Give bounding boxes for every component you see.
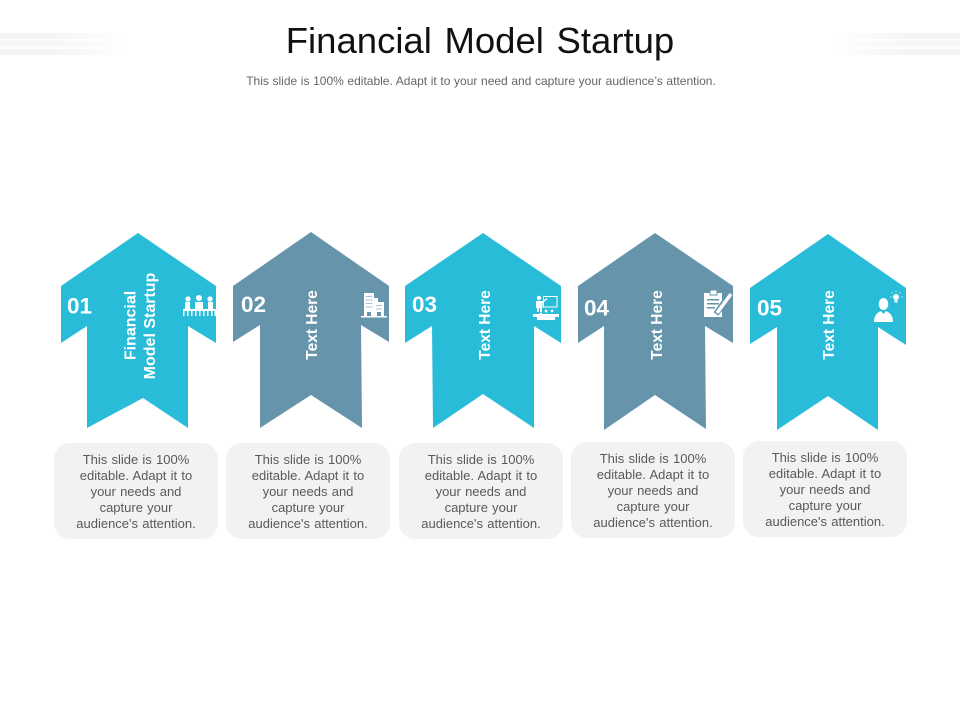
icon: building xyxy=(361,293,387,318)
text card 3: audience's attention. xyxy=(421,516,541,531)
arrow 4: Text Here xyxy=(649,290,666,360)
text card 1: capture your xyxy=(100,500,172,515)
text card 5: audience's attention. xyxy=(765,514,885,529)
arrow 1: Financial xyxy=(122,291,140,360)
arrow 4 xyxy=(578,233,733,430)
arrow 3: Text Here xyxy=(477,290,494,360)
arrow 2 xyxy=(233,232,389,428)
text card 1: editable. Adapt it to xyxy=(80,468,192,483)
text card 2: This slide is 100% xyxy=(255,452,361,467)
text card 2: editable. Adapt it to xyxy=(252,468,364,483)
decorative stripes left xyxy=(0,33,70,55)
arrow 2: Text Here xyxy=(304,290,321,360)
arrow 2: 02 xyxy=(241,292,266,317)
text card 4: audience's attention. xyxy=(593,515,713,530)
text card 2: your needs and xyxy=(263,484,353,499)
arrow 5 xyxy=(750,234,906,430)
text card 1: your needs and xyxy=(91,484,181,499)
text card 5: your needs and xyxy=(780,482,870,497)
subtitle: This slide is 100% editable. Adapt it to your need and capture your audience’s attention. xyxy=(246,74,716,88)
text card 3: capture your xyxy=(445,500,517,515)
text card 3 xyxy=(399,443,563,539)
text card 2 xyxy=(226,443,390,539)
text card 1 xyxy=(54,443,218,539)
arrow 4: 04 xyxy=(584,296,610,320)
arrow 1 xyxy=(61,233,216,428)
arrow 5: Text Here xyxy=(821,290,838,360)
arrow 3 xyxy=(405,233,561,428)
text card 4: editable. Adapt it to xyxy=(597,467,709,482)
text card 4: capture your xyxy=(617,499,689,514)
text card 4 xyxy=(571,442,735,538)
arrow 3: 03 xyxy=(412,292,437,317)
text card 5: capture your xyxy=(789,498,861,513)
text card 4: This slide is 100% xyxy=(600,451,706,466)
text card 5: editable. Adapt it to xyxy=(769,466,881,481)
text card 5: This slide is 100% xyxy=(772,450,878,465)
text card 2: capture your xyxy=(272,500,344,515)
text card 3: editable. Adapt it to xyxy=(425,468,537,483)
text card 4: your needs and xyxy=(608,483,698,498)
text card 3: This slide is 100% xyxy=(428,452,534,467)
icon: person with idea xyxy=(874,291,902,322)
arrow 1: 01 xyxy=(67,294,92,318)
title: Financial Model Startup xyxy=(286,20,674,61)
text card 5 xyxy=(743,441,907,537)
text card 1: This slide is 100% xyxy=(83,452,189,467)
arrow 5: 05 xyxy=(757,296,782,320)
decorative stripes right xyxy=(890,33,960,55)
text card 1: audience's attention. xyxy=(76,516,196,531)
icon: meeting people xyxy=(183,295,216,316)
text card 3: your needs and xyxy=(436,484,526,499)
icon: presenter xyxy=(533,296,559,320)
icon: clipboard xyxy=(704,290,731,317)
text card 2: audience's attention. xyxy=(248,516,368,531)
arrow 1: Model Startup xyxy=(142,272,159,379)
